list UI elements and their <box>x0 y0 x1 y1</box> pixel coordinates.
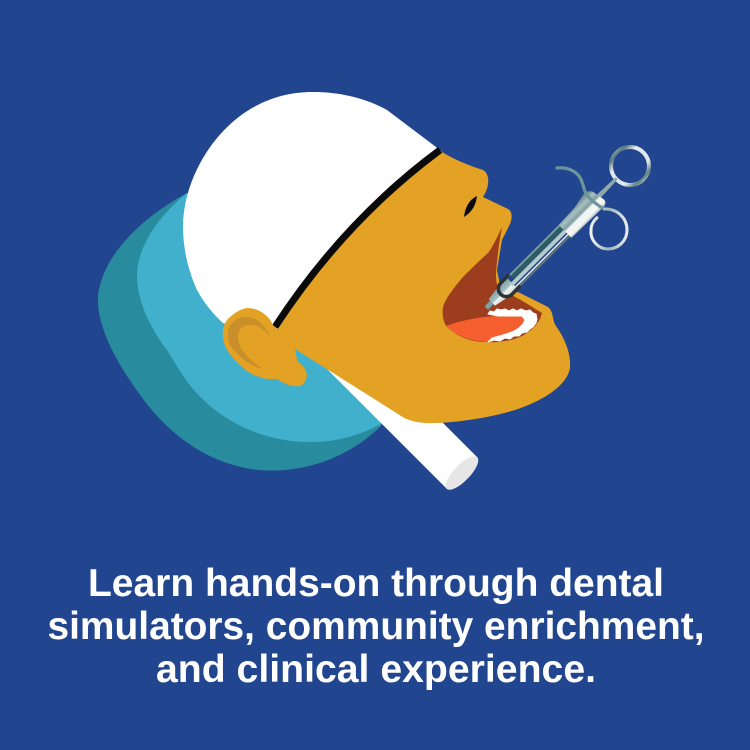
nostril <box>464 196 477 217</box>
syringe thumb ring <box>611 147 649 185</box>
curved thumb wire <box>557 168 602 208</box>
plunger rod <box>595 177 618 200</box>
illustration: patient head with dental syringe <box>98 92 649 494</box>
caption text: simulators, community enrichment, <box>48 605 704 648</box>
tube end cap <box>441 452 483 494</box>
dental syringe <box>478 147 649 316</box>
headrest: dark teal back cushion <box>98 193 382 471</box>
caption text <box>48 562 704 691</box>
tongue <box>446 314 530 342</box>
headrest: light blue cushion <box>137 193 400 442</box>
inner ear fold <box>228 317 271 369</box>
caption text: Learn hands-on through dental <box>88 562 664 605</box>
needle tip <box>484 300 494 310</box>
syringe finger ring <box>591 209 627 249</box>
black cap band <box>275 150 440 327</box>
caption text: and clinical experience. <box>156 648 596 691</box>
nose <box>487 278 517 308</box>
syringe body along axis <box>478 170 624 316</box>
barrel <box>556 187 608 238</box>
teeth <box>488 309 537 342</box>
frame loop <box>495 274 521 300</box>
open mouth <box>443 227 542 342</box>
ear <box>223 308 307 386</box>
cartridge frame strips <box>504 224 562 282</box>
white support tube <box>328 330 483 494</box>
white surgical cap <box>183 92 442 340</box>
face <box>272 152 570 423</box>
